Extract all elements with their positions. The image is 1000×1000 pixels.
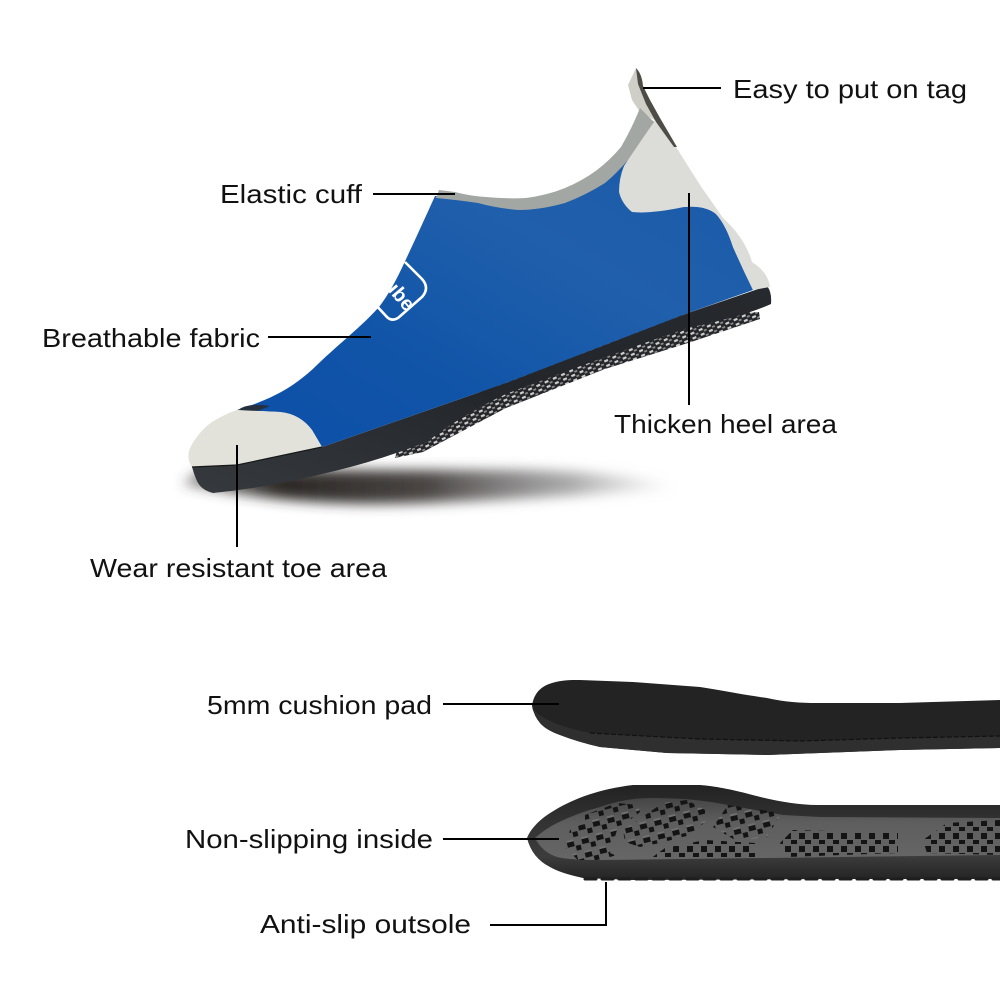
cushion pad insole (532, 680, 1000, 755)
sole inner surface (535, 798, 1000, 860)
dark sole seam (192, 447, 322, 467)
black rubber sole (192, 286, 771, 493)
shoe shadow (182, 470, 672, 504)
dark toe edge behind cap (238, 405, 270, 412)
label: wear resistant toe area: Wear resistant toe area (90, 553, 388, 583)
midfoot lug cluster (780, 830, 898, 857)
label: non-slipping inside: Non-slipping inside (185, 824, 433, 854)
heel lug cluster: right (713, 805, 782, 840)
logo text: ube (379, 274, 419, 315)
elastic cuff band (436, 108, 654, 210)
toe cap (188, 410, 322, 467)
bottom lug band (650, 840, 755, 859)
tag and heel panel (619, 120, 770, 290)
label: thicken heel area: Thicken heel area (614, 409, 838, 439)
tag dark edge (636, 68, 677, 147)
label: 5mm cushion pad: 5mm cushion pad (207, 690, 432, 720)
label: easy to put on tag: Easy to put on tag (733, 74, 967, 104)
scalloped bottom edge (585, 878, 1000, 880)
shoe illustration (188, 68, 771, 493)
anti-slip sole (527, 785, 1000, 880)
pad side edge (532, 708, 1000, 755)
pad seam (590, 733, 1000, 741)
pull tag (628, 68, 660, 123)
logo badge (374, 262, 426, 320)
label: anti-slip outsole: Anti-slip outsole (260, 909, 471, 939)
heel lug cluster: left (565, 803, 640, 860)
label: anti-slip outsole (260, 882, 606, 939)
label: elastic cuff: Elastic cuff (220, 179, 363, 209)
blue fabric upper (237, 155, 753, 447)
forefoot lug cluster (923, 820, 1000, 855)
heel lug cluster: centre (623, 800, 705, 847)
label: breathable fabric: Breathable fabric (42, 323, 260, 353)
outsole tread strip (395, 312, 760, 458)
